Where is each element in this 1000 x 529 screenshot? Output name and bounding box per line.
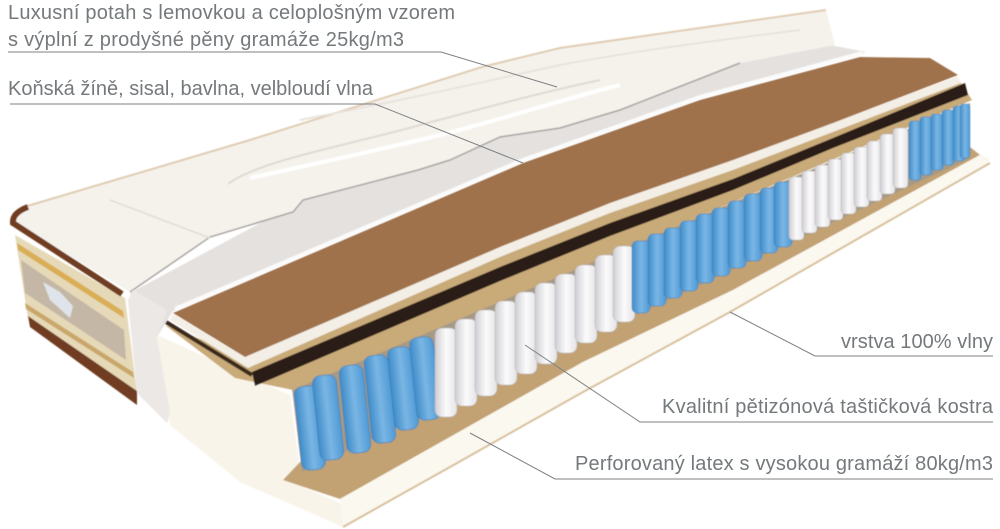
brown piping of the cover xyxy=(13,207,122,294)
tan layer under the springs xyxy=(283,143,980,499)
foam latex end face xyxy=(157,150,990,527)
white foam slab xyxy=(340,155,990,527)
springs: blue middle group xyxy=(632,182,792,313)
mattress side panel xyxy=(15,235,137,405)
callout: pocket springs xyxy=(525,345,994,422)
springs: white group two xyxy=(789,128,908,240)
white felt band xyxy=(170,77,961,368)
coconut fibre layer xyxy=(173,57,958,357)
springs: white group one xyxy=(435,246,635,417)
strap xyxy=(128,290,170,423)
springs: blue left group xyxy=(294,336,441,471)
black horsehair layer xyxy=(166,83,968,386)
callout: cover: s výplní z prodyšné pěny gramáže 25kg/m3 xyxy=(8,29,404,51)
fabric band below cover xyxy=(130,45,866,337)
quilted top cover xyxy=(13,10,835,292)
callout: wool layer: vrstva 100% vlny xyxy=(841,331,993,353)
spring backing xyxy=(292,103,970,472)
tan felt band xyxy=(165,77,972,390)
callout: latex xyxy=(470,433,993,479)
springs: blue right group xyxy=(909,104,970,180)
callout: natural fibres: Koňská žíně, sisal, bavlna, velbloudí vlna xyxy=(8,78,374,100)
callout: latex: Perforovaný latex s vysokou gramáží 80kg/m3 xyxy=(575,453,993,475)
callout: natural fibres xyxy=(8,78,523,163)
callout: wool layer xyxy=(730,312,993,356)
callout: pocket springs: Kvalitní pětizónová taštičková kostra xyxy=(662,396,994,418)
callout: cover xyxy=(8,2,557,87)
callout: cover: Luxusní potah s lemovkou a celoplošným vzorem xyxy=(8,2,455,24)
